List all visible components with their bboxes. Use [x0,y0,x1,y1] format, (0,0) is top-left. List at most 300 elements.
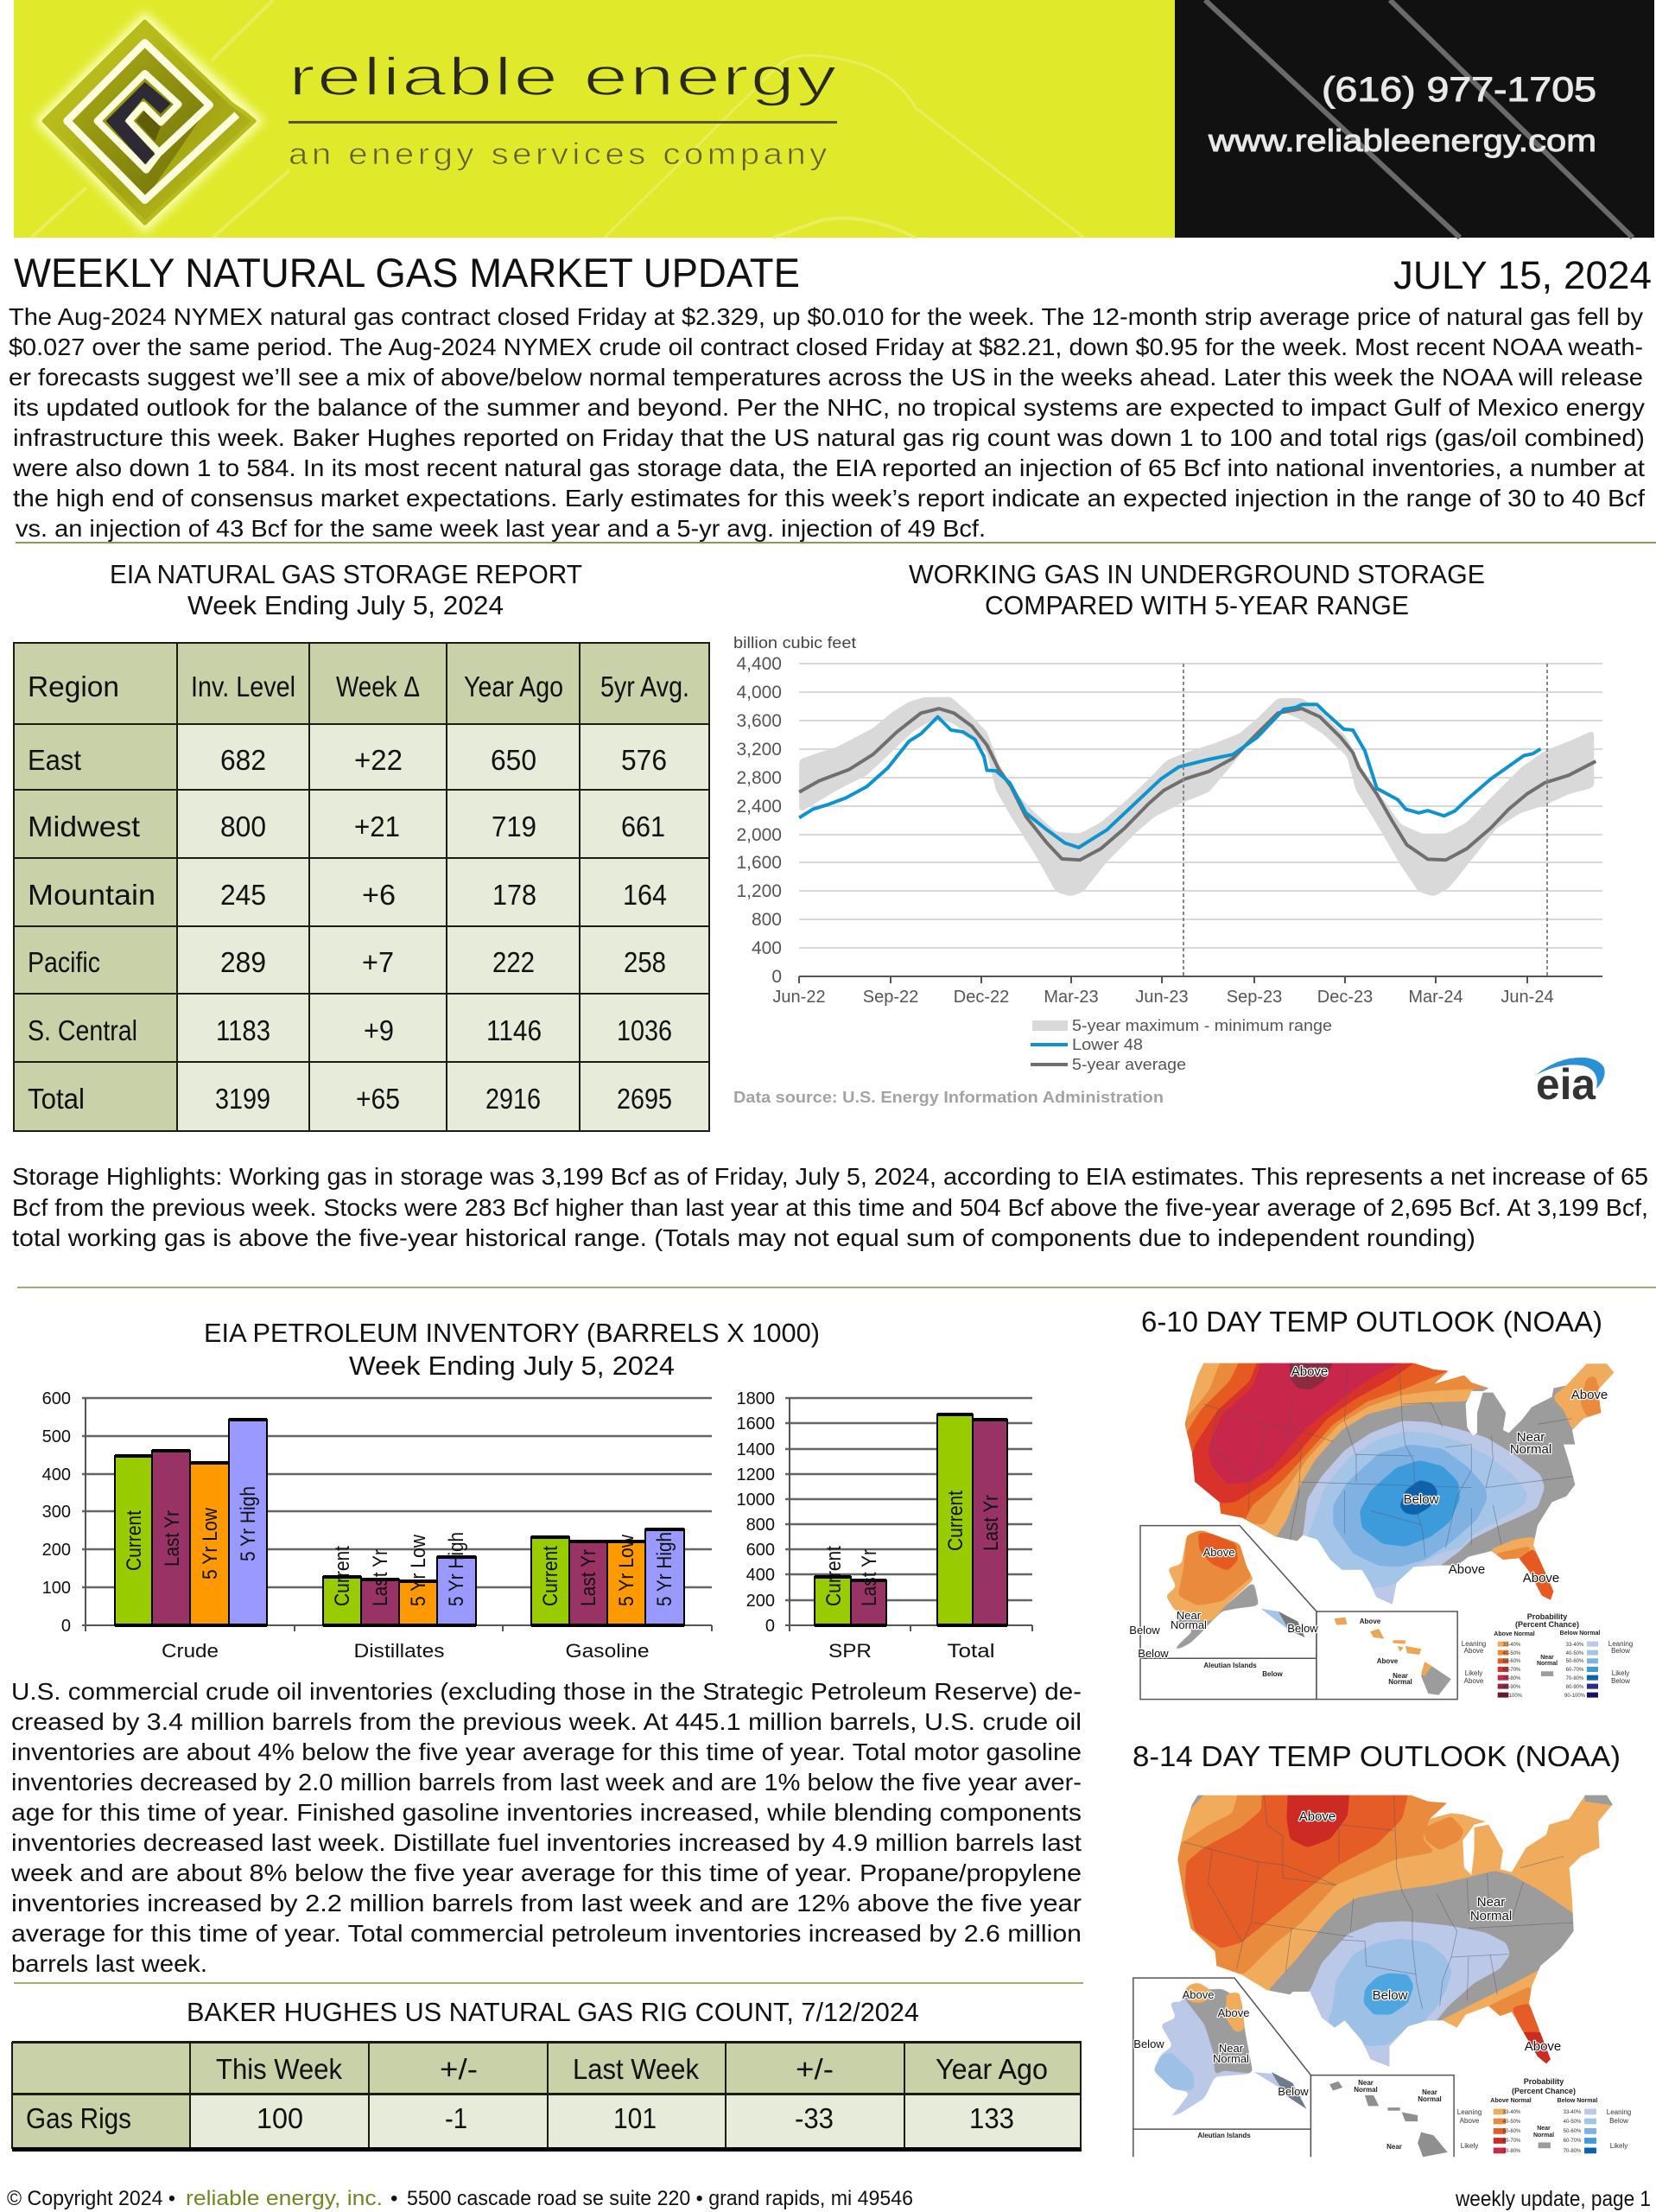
x axis labels: Sep-22 [863,988,918,1007]
banner: yellow panel [14,0,1175,238]
y axis labels [736,1389,775,1636]
rotated series labels: Last Yr [577,1549,600,1606]
map labels: Normal [1388,1678,1412,1686]
text block: market summary: its updated outlook for the balance of the summer and beyond. Per the NHC, no tropical systems are expected to impact Gulf of Mexico energy [13,394,1645,421]
data source note: Data source: U.S. Energy Information Administration [733,1089,1164,1106]
map legend text: 90-100% [1564,1694,1586,1699]
map legend text: Below [1611,1677,1630,1685]
text block: petroleum inventory commentary: creased by 3.4 million barrels from the previous week. At 445.1 million barrels, U.S. crude oil [11,1708,1082,1735]
title: weekly natural gas market update: WEEKLY NATURAL GAS MARKET UPDATE [14,250,800,296]
logo rule [289,121,837,124]
text block: storage highlights [12,1163,1648,1251]
bars: distillates [323,1557,476,1625]
chart legend: 5-year average [1072,1056,1186,1073]
row: East [28,744,667,776]
row: Mountain: 164 [623,879,667,911]
text block: market summary: $0.027 over the same period. The Aug-2024 NYMEX crude oil contract closed Friday at $82.21, down $0.95 for the week. Most recent NOAA weath- [9,334,1643,360]
rotated series labels: 5 Yr Low [615,1534,638,1606]
x axis labels: Sep-23 [1227,988,1282,1007]
map legend text: 60-70% [1503,1668,1521,1673]
Alaska map shape [1169,1581,1259,1653]
rotated series labels: Current [822,1546,846,1606]
map legend text: Above [1464,1677,1484,1685]
phone number: (616) 977-1705 [1322,71,1596,109]
map legend text: Below Normal [1558,2098,1597,2104]
x axis labels: Mar-23 [1044,988,1099,1007]
y axis labels: 0 [771,967,782,987]
text block: storage highlights: total working gas is above the five-year historical range. (Totals may not equal sum of components due to independent rounding) [12,1224,1475,1251]
footer: copyright and address [7,2187,913,2210]
map labels: Below [1133,2037,1164,2050]
category labels: Total [947,1640,995,1662]
contiguous US probability bands [1177,1796,1612,2067]
map legend text: Below [1609,2117,1628,2125]
map labels: Below [1278,2085,1309,2098]
row: Midwest: 661 [621,810,665,842]
row: Total: 2695 [617,1083,672,1115]
text block: market summary: er forecasts suggest we’ll see a mix of above/below normal temperatures across the US in the weeks ahead. Later this week the NOAA will release [9,364,1643,391]
heading: EIA petroleum inventory: EIA PETROLEUM INVENTORY (BARRELS X 1000) [204,1318,820,1348]
map legend text: 50-60% [1503,1659,1521,1664]
map legend text: 60-70% [1564,2139,1582,2144]
heading: working gas in underground storage: COMPARED WITH 5-YEAR RANGE [985,590,1409,620]
row: Midwest: +21 [354,810,400,842]
rotated series labels: 5 Yr High [445,1532,468,1606]
rotated series labels: Current [123,1510,146,1571]
rig table row: 133 [969,2102,1014,2134]
x axis labels [772,988,1554,1007]
category labels: Crude [162,1640,219,1662]
map legend text: Above [1464,1647,1484,1655]
text block: market summary: vs. an injection of 43 Bcf for the same week last year and a 5-yr avg. injection of 49 Bcf. [16,515,986,542]
legend swatches: above normal [1498,1642,1508,1698]
y axis labels: 0 [61,1617,71,1636]
y axis labels: 1600 [736,1414,775,1433]
y axis labels: 1,200 [736,881,782,901]
bar chart: SPR and total inventories [736,1389,1032,1662]
5-year average line [799,709,1596,860]
row: S. Central: 1183 [216,1014,270,1046]
rotated series labels [123,1486,676,1606]
icon: eia logo: eia [1536,1060,1596,1109]
y axis labels: 2,800 [736,768,782,788]
chart: working gas in storage vs 5-year range: billion cubic feet [733,634,856,652]
map labels: Below [1138,1647,1169,1660]
map labels: Normal [1470,1909,1512,1923]
map labels: Near [1393,1672,1408,1680]
table: natural gas storage by region [14,643,709,1131]
rig table row [26,2102,1014,2134]
table header row: Inv. Level [191,671,295,702]
map labels: Below [1287,1622,1318,1635]
row: Midwest: 800 [220,810,266,842]
row: Midwest [28,810,665,842]
map legend text: 70-80% [1503,1676,1521,1681]
text block: petroleum inventory commentary: inventories increased by 2.2 million barrels from last week and are 12% above the five year [11,1890,1082,1916]
y axis labels: 0 [765,1617,775,1636]
rig table header: Last Week [573,2053,699,2085]
x axis labels: Jun-23 [1135,988,1189,1007]
map labels: Normal [1418,2095,1442,2103]
map legend text: 70-80% [1566,1676,1584,1681]
chart legend [1031,1017,1332,1073]
row: Mountain [28,879,667,911]
footer: copyright and address: • [390,2187,397,2210]
row: S. Central: S. Central [28,1014,137,1046]
y axis labels: 800 [752,910,782,930]
map labels: Above [1299,1809,1336,1824]
map labels: Near [1517,1430,1545,1445]
y axis labels: 200 [746,1592,775,1611]
row: East: East [28,744,81,776]
row: Pacific: +7 [362,946,394,978]
Hawaii islands [1334,1618,1421,1655]
rig table header: +/- [796,2053,834,2085]
map labels: Above [1218,2006,1249,2019]
row: Pacific [28,946,666,978]
rig table row: Gas Rigs [26,2102,131,2134]
row: Total: 2916 [485,1083,541,1115]
y axis labels: 2,400 [736,797,782,817]
map labels: Normal [1171,1618,1207,1631]
heading: 6-10 day temp outlook: 6-10 DAY TEMP OUTLOOK (NOAA) [1141,1306,1602,1338]
row: Total [28,1083,672,1115]
row: Mountain: +6 [362,879,396,911]
text block: market summary: The Aug-2024 NYMEX natural gas contract closed Friday at $2.329, up $0.010 for the week. The 12-month strip average price of natural gas fell by [9,303,1643,330]
map legend text: 40-50% [1566,1651,1584,1656]
map legend text: Likely [1461,2142,1478,2150]
website: www.reliableenergy.com [1208,123,1596,158]
y axis labels: 300 [42,1503,71,1522]
y axis labels: 1200 [736,1465,775,1484]
chart: working gas in storage vs 5-year range [733,634,1605,1109]
y axis labels [736,654,782,987]
row: Total: 3199 [215,1083,270,1115]
5-year max-min range band [799,697,1594,897]
map labels: Normal [1354,2086,1378,2094]
map legend text: 50-60% [1564,2129,1582,2134]
map labels: Above [1183,1988,1214,2001]
text block: petroleum inventory commentary: inventories decreased by 2.0 million barrels from last week and are 1% below the five year aver- [11,1769,1082,1796]
y axis labels: 4,000 [736,683,782,702]
map legend text: Leaning [1608,1640,1633,1648]
current-year dashed markers [1183,664,1547,976]
heading: Baker Hughes rig count: BAKER HUGHES US NATURAL GAS RIG COUNT, 7/12/2024 [187,1997,919,2027]
x axis labels: Dec-22 [954,988,1009,1007]
decorative diagonal lines in black panel [1205,0,1633,238]
x axis labels: Dec-23 [1317,988,1373,1007]
bars: total [937,1414,1007,1625]
company name: reliable energy [289,47,837,106]
table header row [28,671,689,702]
map legend text: Likely [1610,2142,1627,2150]
heading: EIA natural gas storage report: EIA NATURAL GAS STORAGE REPORT [110,559,582,589]
map labels: Near [1477,1895,1505,1910]
contiguous US probability bands [1185,1363,1614,1604]
row: East: +22 [354,744,403,776]
heading: EIA natural gas storage report [110,559,582,620]
chart legend: Lower 48 [1072,1036,1143,1053]
map labels: Near [1177,1609,1202,1622]
Alaska and Aleutian inset frame [1133,1978,1310,2157]
map legend text: 80-90% [1503,1685,1521,1690]
state boundary lines [1203,1363,1575,1557]
y axis labels: 400 [746,1566,775,1585]
map legend text: Leaning [1607,2108,1631,2116]
text block: market summary: infrastructure this week. Baker Hughes reported on Friday that the US natural gas rig count was down 1 to 100 and total rigs (gas/oil combined) [13,424,1645,451]
map legend text: Leaning [1457,2108,1482,2116]
map legend text: Likely [1465,1669,1482,1677]
text block: market summary: were also down 1 to 584. In its most recent natural gas storage data, the EIA reported an injection of 65 Bcf into national inventories, a number at [12,454,1645,481]
map legend text: 33-40% [1503,1643,1521,1648]
row: Mountain: 245 [220,879,266,911]
map legend text [1462,1612,1633,1699]
rotated series labels: 5 Yr High [237,1486,260,1561]
map legend text: 40-50% [1503,1651,1521,1656]
table header row: Year Ago [464,671,563,702]
map legend text: 40-50% [1564,2120,1582,2125]
map labels: Aleutian Islands [1203,1662,1257,1669]
text block: petroleum inventory commentary: U.S. commercial crude oil inventories (excluding those in the Strategic Petroleum Reserve) de- [11,1678,1082,1705]
rig table row: -33 [795,2102,834,2134]
legend swatches: below normal [1587,1642,1598,1698]
rotated series labels: Last Yr [369,1549,392,1606]
state boundary lines [1183,1796,1574,2009]
map legend text: Above Normal [1494,1631,1535,1637]
y axis labels: 600 [42,1389,71,1408]
text block: storage highlights: Bcf from the previous week. Stocks were 283 Bcf higher than last year at this time and 504 Bcf above the five-year average of 2,695 Bcf. At 3,199 Bcf, [12,1194,1648,1221]
chart legend: 5-year maximum - minimum range [1072,1017,1332,1034]
rig table row: -1 [445,2102,467,2134]
map legend text: Near [1537,2126,1551,2132]
decorative light shapes in yellow panel [31,0,1084,238]
text block: petroleum inventory commentary: average for this time of year. Total commercial petroleum inventories increased by 2.6 million [11,1920,1082,1947]
company tagline: an energy services company [289,137,827,170]
Hawaii islands [1329,2082,1448,2157]
rotated series labels [822,1491,1003,1606]
map legend text: 70-80% [1503,2149,1521,2154]
row: Total: +65 [356,1083,400,1115]
map labels: Normal [1213,2052,1249,2065]
row: S. Central: 1036 [617,1014,672,1046]
footer: copyright and address: © Copyright 2024 • [7,2187,175,2210]
date: JULY 15, 2024 [1393,253,1652,297]
map legend text [1457,2077,1631,2154]
page header banner [14,0,1654,238]
row: Pacific: 289 [220,946,266,978]
text block: petroleum inventory commentary: age for this time of year. Finished gasoline inventories increased, while blending components [11,1799,1082,1826]
heading: 8-14 day temp outlook: 8-14 DAY TEMP OUTLOOK (NOAA) [1133,1740,1621,1772]
row: East: 650 [491,744,536,776]
x axis [799,976,1602,983]
footer: copyright and address: 5500 cascade road se suite 220 • grand rapids, mi 49546 [407,2187,913,2210]
row: Mountain: 178 [492,879,536,911]
row: Mountain: Mountain [28,879,155,911]
text block: market summary: the high end of consensus market expectations. Early estimates for this week’s report indicate an expected injection in the range of 30 to 40 Bcf [13,485,1645,512]
y axis labels: 4,400 [736,654,782,674]
text block: petroleum inventory commentary: week and are about 8% below the five year average for this time of year. Propane/propylene [10,1859,1082,1886]
row: Pacific: 222 [492,946,535,978]
bars: crude [115,1420,267,1625]
y axis labels: 3,600 [736,711,782,731]
legend swatch: near normal [1541,1671,1553,1676]
Alaska and Aleutian inset frame [1140,1526,1317,1700]
y axis labels: 200 [42,1541,71,1560]
y axis labels: 1800 [736,1389,775,1408]
map labels: Below [1129,1624,1160,1637]
heading: working gas in underground storage: WORKING GAS IN UNDERGROUND STORAGE [909,559,1485,589]
category labels: Gasoline [565,1640,650,1662]
y axis labels: 2,000 [736,825,782,845]
y axis labels: 800 [746,1516,775,1535]
rotated series labels: Last Yr [858,1549,881,1606]
row: S. Central: 1146 [486,1014,542,1046]
map legend text: 40-50% [1503,2120,1521,2125]
map legend text: (Percent Chance) [1515,1620,1579,1629]
table: gas rig count [12,2041,1082,2152]
map labels: Above [1523,1571,1559,1586]
map legend text: 60-70% [1503,2139,1521,2144]
text block: petroleum inventory commentary: barrels last week. [11,1950,207,1977]
map legend text: Normal [1537,1661,1558,1667]
rotated series labels: Last Yr [161,1510,184,1567]
category labels [162,1640,650,1662]
rotated series labels: Last Yr [980,1495,1003,1551]
map legend text: Leaning [1462,1640,1486,1648]
y axis labels: 400 [752,938,782,958]
map legend text: Above Normal [1490,2098,1532,2104]
map labels [1129,1364,1608,1686]
text block: petroleum inventory commentary: inventories are about 4% below the five year average for this time of year. Total motor gasoline [11,1738,1082,1765]
y axis labels: 400 [42,1465,71,1484]
Alaska map shape [1153,1990,1253,2125]
row: East: 682 [220,744,266,776]
map labels: Near [1358,2079,1374,2087]
heading: EIA petroleum inventory [204,1318,820,1381]
rig table row: 100 [257,2102,303,2134]
map: 8-14 day temperature outlook [1133,1770,1635,2157]
banner: black contact panel [1175,0,1654,238]
map labels: Near [1386,2143,1402,2151]
bars: gasoline [531,1529,684,1625]
y axis labels: 1000 [736,1491,775,1510]
rotated series labels: Current [539,1546,562,1606]
rig table header: This Week [216,2053,342,2085]
rig table row: 101 [613,2102,657,2134]
map legend text: 50-60% [1566,1659,1584,1664]
x axis labels: Mar-24 [1408,988,1463,1007]
y axis labels: 1,600 [736,853,782,873]
Lower 48 line [799,704,1540,848]
rotated series labels: Current [944,1491,968,1551]
rig table header [216,2053,1048,2085]
rotated series labels: Current [331,1546,354,1606]
map labels: Above [1525,2039,1561,2054]
map legend text: 33-40% [1503,2110,1521,2115]
y axis labels: 600 [746,1541,775,1560]
map labels: Below [1262,1670,1284,1678]
row: Midwest: Midwest [28,810,140,842]
table header row: Week Δ [336,671,420,702]
map legend text: Near [1540,1655,1554,1661]
row: Total: Total [28,1083,85,1115]
chart grid lines [799,664,1602,948]
Hawaii inset frame [1317,1611,1457,1700]
rig table header: Year Ago [936,2053,1048,2085]
map labels: Near [1422,2088,1437,2096]
table header row: Region [28,671,119,702]
rotated series labels: 5 Yr Low [407,1534,430,1606]
footer: copyright and address: reliable energy, inc. [186,2187,383,2210]
map labels: Aleutian Islands [1197,2132,1251,2139]
heading: working gas in underground storage [909,559,1485,620]
map legend text: 70-80% [1564,2149,1582,2154]
legend swatches [1494,2109,1596,2153]
map legend text: 80-90% [1566,1685,1584,1690]
Hawaii inset frame [1310,2075,1454,2157]
rotated series labels: 5 Yr High [653,1532,676,1606]
row: S. Central [28,1014,672,1046]
map legend text: Below [1611,1647,1630,1655]
map legend text: Probability [1524,2077,1564,2086]
map labels: Above [1291,1364,1328,1379]
map legend text: 90-100% [1501,1694,1523,1699]
map labels: Normal [1510,1442,1551,1457]
map legend text: (Percent Chance) [1512,2087,1576,2095]
map labels: Below [1404,1492,1439,1507]
map legend text: Above [1460,2117,1480,2125]
row: S. Central: +9 [364,1014,394,1046]
map legend text: Normal [1533,2133,1554,2139]
map labels [1133,1809,1561,2151]
category labels [828,1640,995,1662]
rig table header: +/- [440,2053,478,2085]
row: Pacific: Pacific [28,946,100,978]
map labels: Below [1373,1988,1408,2003]
map legend text: 60-70% [1566,1668,1584,1673]
y axis labels: 100 [42,1579,71,1598]
text block: petroleum inventory commentary: inventories decreased last week. Distillate fuel inventories increased by 4.9 million barrels last [11,1829,1082,1856]
map: 6-10 day temperature outlook [1129,1338,1644,1700]
y axis labels: 500 [42,1427,71,1446]
row: Midwest: 719 [492,810,536,842]
map legend text: 33-40% [1566,1643,1584,1648]
map labels: Above [1449,1562,1485,1577]
x axis labels: Jun-22 [772,988,826,1007]
text block: petroleum inventory commentary [10,1678,1082,1977]
row: East: 576 [621,744,667,776]
rotated series labels: 5 Yr Low [199,1507,222,1580]
y axis labels: 3,200 [736,740,782,760]
map labels: Near [1219,2042,1244,2055]
data series traced in chart coordinates [799,697,1596,897]
table header row: 5yr Avg. [600,671,689,702]
map legend text: Probability [1527,1612,1567,1621]
category labels: SPR [828,1640,872,1662]
heading: EIA petroleum inventory: Week Ending July 5, 2024 [349,1351,675,1381]
map legend text: Likely [1612,1669,1629,1677]
heading: EIA natural gas storage report: Week Ending July 5, 2024 [187,590,504,620]
x axis labels: Jun-24 [1501,988,1554,1007]
map legend text: 33-40% [1564,2110,1582,2115]
category labels: Distillates [354,1640,444,1662]
map labels: Above [1571,1388,1608,1402]
map legend text: 50-60% [1503,2129,1521,2134]
map labels: Above [1377,1657,1399,1665]
y axis labels: 1400 [736,1440,775,1459]
map legend text: Below Normal [1560,1630,1600,1637]
bar chart: crude, distillates, gasoline inventories [42,1389,712,1662]
